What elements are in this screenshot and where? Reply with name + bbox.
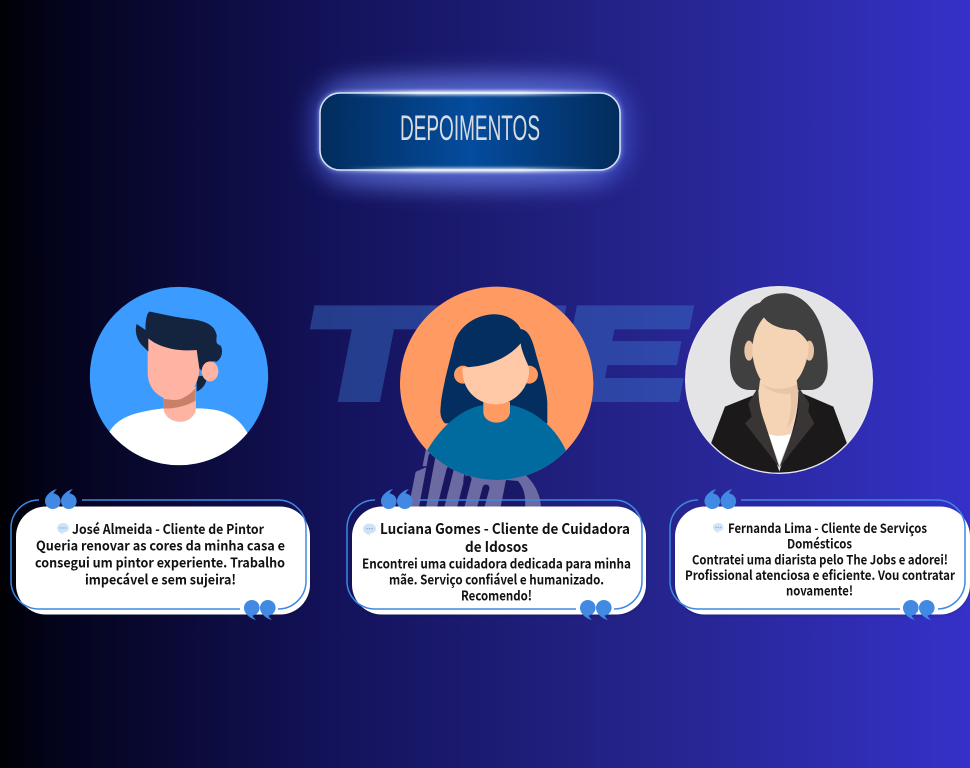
testimonial text: impecável e sem sujeira!	[85, 568, 236, 588]
testimonial text: Domésticos	[787, 534, 852, 552]
icon: speech bubble	[57, 523, 69, 534]
opening quote mark	[704, 489, 736, 509]
testimonial text	[35, 518, 285, 588]
testimonial text: novamente!	[786, 580, 853, 600]
closing quote mark	[903, 600, 935, 620]
testimonial card: Fernanda Lima	[670, 489, 970, 620]
testimonial text: Fernanda Lima - Cliente de Serviços	[728, 518, 927, 537]
testimonial text	[362, 518, 631, 604]
watermark: JOBS: JOBS	[404, 389, 567, 557]
testimonial card: José Almeida	[11, 489, 310, 620]
icon: speech bubble	[713, 523, 723, 533]
avatar: Fernanda (businesswoman on grey circle)	[686, 287, 872, 480]
testimonial text: José Almeida - Cliente de Pintor	[72, 518, 264, 538]
watermark: THE: THE	[297, 284, 702, 424]
testimonial text	[685, 518, 955, 600]
testimonial text: de Idosos	[465, 536, 528, 557]
testimonial card: Luciana Gomes	[347, 489, 646, 620]
closing quote mark	[244, 600, 276, 620]
testimonial text: Recomendo!	[461, 584, 532, 604]
testimonial text: consegui um pintor experiente. Trabalho	[35, 552, 285, 572]
testimonial text: Queria renovar as cores da minha casa e	[36, 534, 285, 554]
avatar: José (man on blue circle)	[90, 287, 268, 480]
avatar: Luciana (woman on orange circle)	[400, 287, 593, 493]
opening quote mark	[381, 489, 413, 509]
title text: DEPOIMENTOS	[400, 109, 540, 148]
opening quote mark	[45, 489, 77, 509]
testimonial text: mãe. Serviço confiável e humanizado.	[389, 568, 604, 588]
title button: Depoimentos	[312, 74, 628, 189]
testimonial text: Luciana Gomes - Cliente de Cuidadora	[380, 518, 630, 539]
testimonial text: Encontrei uma cuidadora dedicada para minha	[362, 552, 631, 572]
icon: speech bubble	[363, 524, 376, 536]
closing quote mark	[580, 600, 612, 620]
watermark: JOBS	[410, 449, 541, 506]
